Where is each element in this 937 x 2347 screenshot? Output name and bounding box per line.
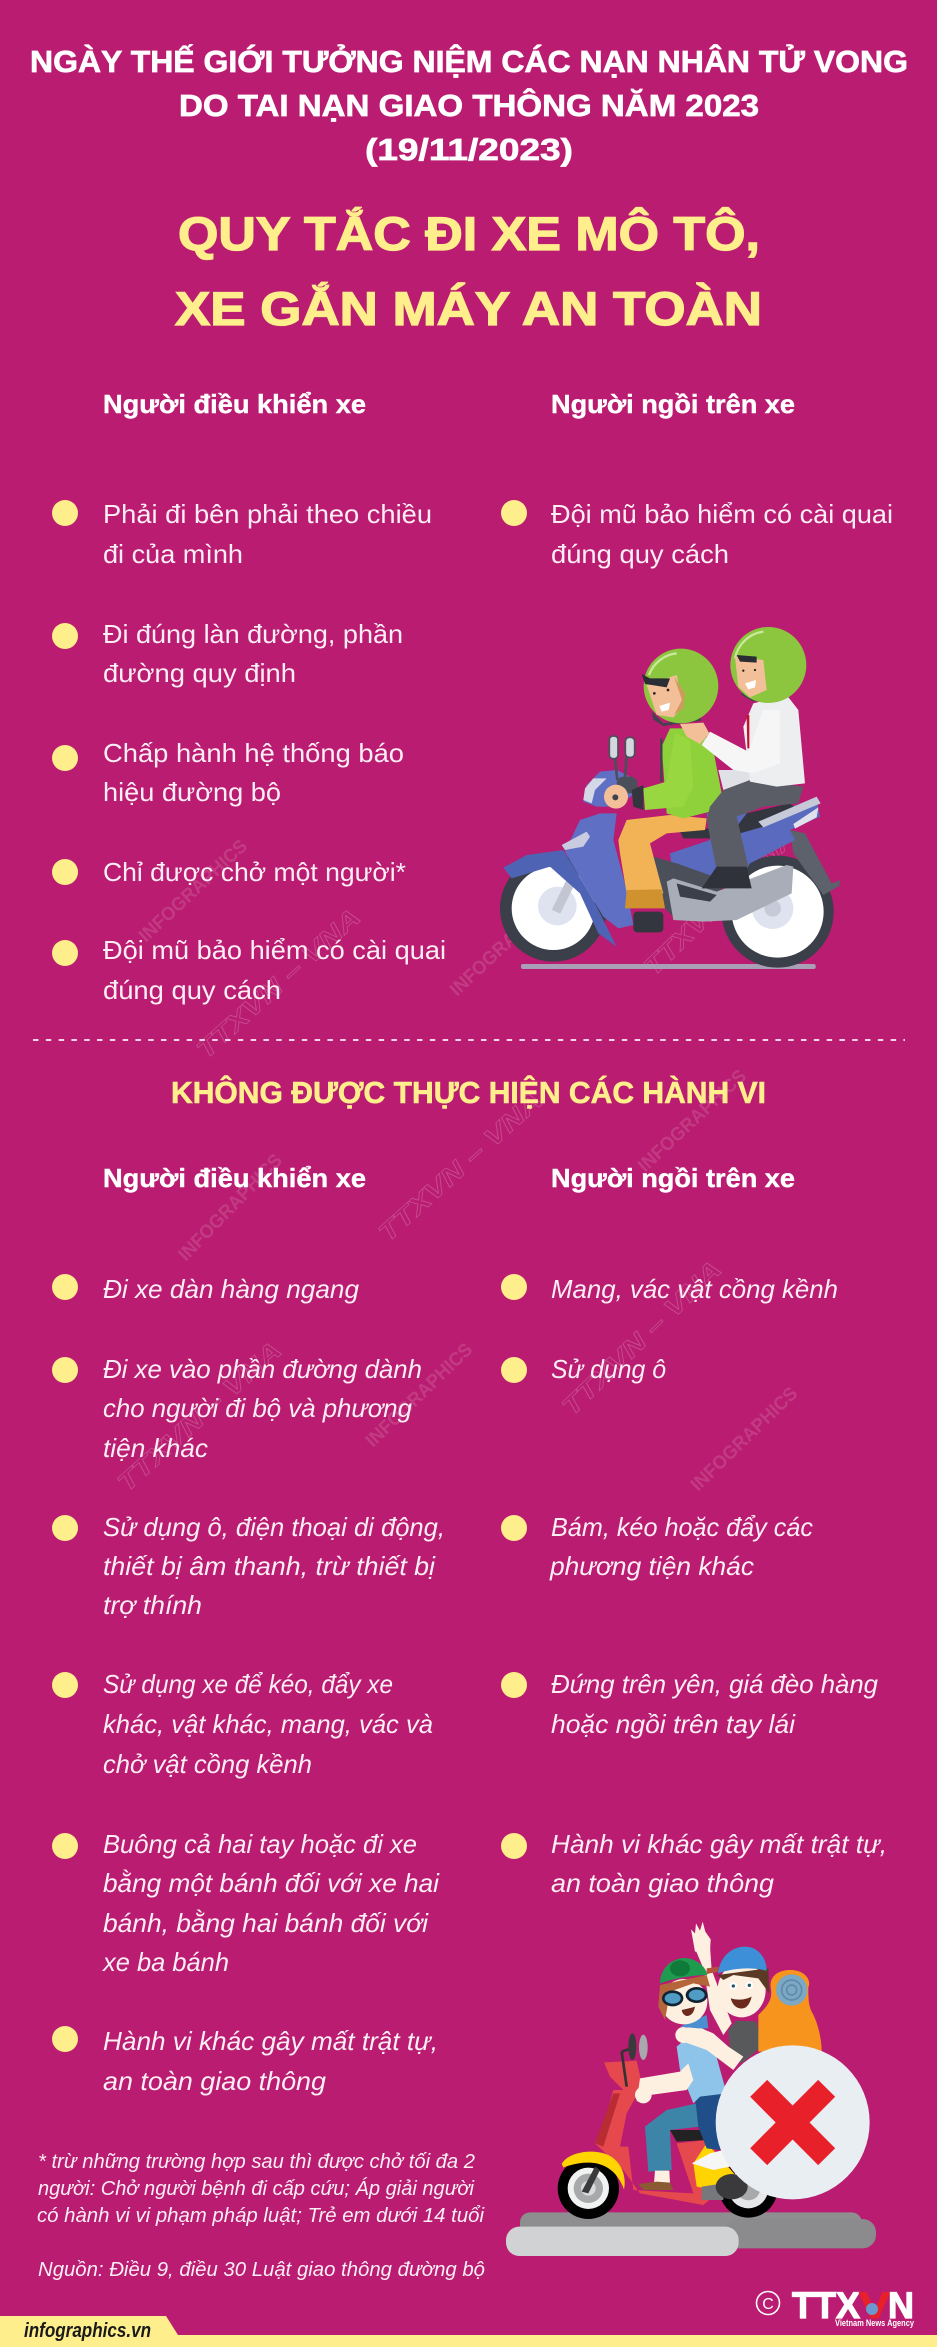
watermarks: TTXVN – VNA bbox=[639, 822, 802, 981]
title: event name: NGÀY THẾ GIỚI TƯỞNG NIỆM CÁC NẠN NHÂN TỬ VONG bbox=[30, 43, 908, 79]
list item: Đi xe dàn hàng ngang bbox=[103, 1274, 360, 1304]
list item bbox=[501, 1354, 666, 1384]
list item bbox=[52, 1354, 422, 1463]
list item: phương tiện khác bbox=[549, 1551, 754, 1581]
list item bbox=[501, 499, 893, 569]
footnote bbox=[37, 2150, 485, 2227]
list item: Sử dụng ô, điện thoại di động, bbox=[103, 1512, 445, 1542]
list item: an toàn giao thông bbox=[551, 1868, 775, 1898]
list item: đúng quy cách bbox=[103, 975, 281, 1005]
list item: tiện khác bbox=[103, 1433, 208, 1463]
main heading: XE GẮN MÁY AN TOÀN bbox=[175, 282, 762, 335]
logo: TTXVN: C bbox=[762, 2296, 774, 2313]
list item: trợ thính bbox=[103, 1590, 202, 1620]
panel: prohibited, passenger column bbox=[501, 1163, 887, 1898]
list item bbox=[501, 1669, 879, 1739]
list item: Hành vi khác gây mất trật tự, bbox=[551, 1829, 887, 1859]
list item: chở vật cồng kềnh bbox=[103, 1749, 312, 1779]
column heading: passenger: Người ngồi trên xe bbox=[551, 1163, 795, 1193]
list item: Chấp hành hệ thống báo bbox=[103, 738, 404, 768]
logo: TTXVN bbox=[756, 2285, 914, 2328]
footer bar bbox=[0, 2316, 937, 2347]
list item: hoặc ngồi trên tay lái bbox=[551, 1709, 796, 1739]
site name: infographics.vn bbox=[24, 2320, 151, 2342]
list item bbox=[52, 935, 446, 1005]
watermarks: TTXVN – VNA bbox=[373, 1086, 548, 1247]
column heading: driver: Người điều khiển xe bbox=[103, 389, 366, 419]
section heading: prohibited behaviours: KHÔNG ĐƯỢC THỰC HIỆN CÁC HÀNH VI bbox=[171, 1074, 766, 1110]
list item: đúng quy cách bbox=[551, 539, 729, 569]
panel: prohibited, driver column bbox=[52, 1163, 445, 2096]
logo: TTXVN: TTX bbox=[792, 2285, 860, 2326]
watermarks: TTXVN – VNA bbox=[557, 1255, 727, 1421]
column heading: driver: Người điều khiển xe bbox=[103, 1163, 366, 1193]
logo: TTXVN: Vietnam News Agency bbox=[835, 2318, 914, 2328]
main heading bbox=[175, 207, 762, 335]
list item: Đi đúng làn đường, phần bbox=[103, 619, 403, 649]
list item bbox=[52, 1829, 440, 1977]
source: Nguồn: Điều 9, điều 30 Luật giao thông đường bộ bbox=[38, 2258, 485, 2281]
list item bbox=[52, 619, 403, 688]
watermarks: INFOGRAPHICS bbox=[634, 1066, 751, 1177]
list item bbox=[52, 738, 404, 807]
title: event name: DO TAI NẠN GIAO THÔNG NĂM 2023 bbox=[179, 87, 759, 123]
illustration: scooter riders without proper behaviour, crossed out bbox=[506, 1922, 876, 2256]
logo: TTXVN: V bbox=[859, 2285, 890, 2326]
list item: Hành vi khác gây mất trật tự, bbox=[103, 2026, 438, 2056]
illustration: two riders with helmets on a motorbike bbox=[500, 627, 840, 969]
list item: Đứng trên yên, giá đèo hàng bbox=[551, 1669, 879, 1699]
list item: thiết bị âm thanh, trừ thiết bị bbox=[103, 1551, 436, 1581]
divider bbox=[33, 1039, 905, 1041]
list item: Đội mũ bảo hiểm có cài quai bbox=[551, 499, 893, 529]
title: event name bbox=[30, 43, 908, 167]
footnote: có hành vi vi phạm pháp luật; Trẻ em dưới 14 tuổi bbox=[37, 2204, 485, 2227]
list item: hiệu đường bộ bbox=[103, 777, 281, 807]
list item: Đội mũ bảo hiểm có cài quai bbox=[103, 935, 446, 965]
title: event name: (19/11/2023) bbox=[365, 132, 573, 167]
column heading: passenger: Người ngồi trên xe bbox=[551, 389, 795, 419]
list item: Buông cả hai tay hoặc đi xe bbox=[103, 1829, 417, 1859]
footnote: người: Chở người bệnh đi cấp cứu; Áp giải người bbox=[38, 2177, 475, 2200]
list item: đường quy định bbox=[103, 658, 296, 688]
list item: Mang, vác vật cồng kềnh bbox=[551, 1274, 838, 1304]
list item: bánh, bằng hai bánh đối với bbox=[103, 1908, 429, 1938]
watermarks: INFOGRAPHICS bbox=[446, 890, 563, 1001]
logo: TTXVN: N bbox=[888, 2285, 914, 2326]
list item bbox=[501, 1829, 887, 1898]
watermarks: INFOGRAPHICS bbox=[135, 836, 252, 947]
list item bbox=[501, 1512, 813, 1581]
panel: rules, passenger column bbox=[501, 389, 893, 569]
list item bbox=[52, 1512, 445, 1620]
list item bbox=[52, 1669, 433, 1779]
watermarks bbox=[112, 822, 802, 1497]
watermarks: INFOGRAPHICS bbox=[687, 1383, 802, 1496]
watermarks: INFOGRAPHICS bbox=[362, 1339, 477, 1452]
list item: Chỉ được chở một người* bbox=[103, 857, 406, 887]
watermarks: TTXVN – VNA bbox=[112, 1336, 287, 1497]
list item: xe ba bánh bbox=[101, 1947, 229, 1977]
footnote: * trừ những trường hợp sau thì được chở tối đa 2 bbox=[38, 2150, 476, 2173]
list item: khác, vật khác, mang, vác và bbox=[103, 1709, 433, 1739]
panel: rules, driver column bbox=[52, 389, 446, 1005]
list item: an toàn giao thông bbox=[103, 2066, 327, 2096]
list item: đi của mình bbox=[103, 539, 243, 569]
list item: Bám, kéo hoặc đẩy các bbox=[551, 1512, 813, 1542]
list item: bằng một bánh đối với xe hai bbox=[103, 1868, 440, 1898]
main heading: QUY TẮC ĐI XE MÔ TÔ, bbox=[178, 207, 760, 260]
list item: cho người đi bộ và phương bbox=[103, 1393, 413, 1423]
list item: Đi xe vào phần đường dành bbox=[103, 1354, 422, 1384]
list item bbox=[52, 499, 432, 569]
watermarks: TTXVN – VNA bbox=[191, 903, 366, 1064]
list item: Phải đi bên phải theo chiều bbox=[103, 499, 432, 529]
list item: Sử dụng ô bbox=[551, 1354, 666, 1384]
watermarks: INFOGRAPHICS bbox=[174, 1150, 287, 1265]
list item: Sử dụng xe để kéo, đẩy xe bbox=[103, 1669, 393, 1699]
list item bbox=[52, 2026, 438, 2096]
